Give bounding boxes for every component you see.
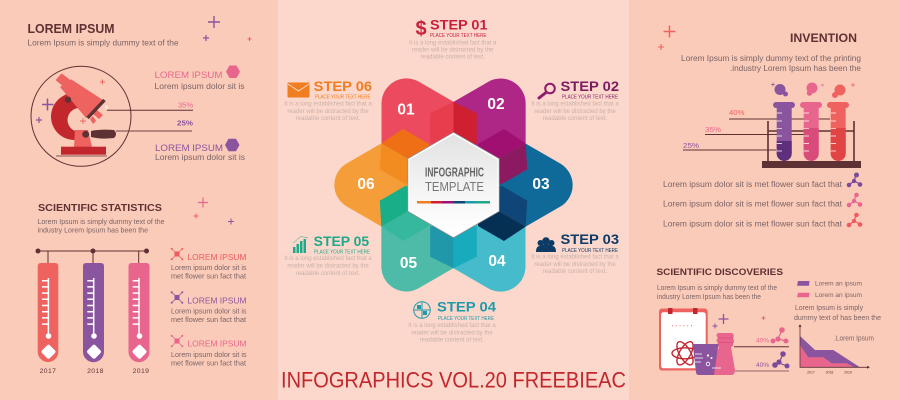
- list item: pink: [171, 335, 247, 368]
- text: invention intro: Lorem Ipsum is simply dummy text of the printing: [681, 54, 861, 63]
- callout: purple label: LOREM IPSUM: [155, 143, 223, 153]
- icon: dollar: $: [415, 18, 427, 40]
- step 05: [284, 234, 372, 277]
- text: invention intro: .industry Lorem Ipsum has been the: [730, 64, 862, 73]
- heading: scientific statistics: SCIENTIFIC STATISTICS: [38, 203, 162, 214]
- legend: Lorem an ipsum: [815, 280, 862, 288]
- list: invention items: Lorem ipsum dolor sit is met flower sun fact that: [663, 220, 843, 228]
- step 06: readable content of text.: [296, 116, 361, 122]
- step 03: reader will be distracted by the: [534, 262, 616, 268]
- petal 02: [418, 69, 546, 185]
- callout: purple 40 percent: [735, 352, 789, 371]
- text: statistics intro: industry Lorem Ipsum has been the: [38, 226, 148, 234]
- petal 05: [361, 185, 490, 301]
- step 04: PLACE YOUR TEXT HERE: [438, 316, 495, 322]
- text: discoveries intro: Lorem Ipsum is simply dummy text of the: [657, 285, 777, 292]
- chart: area chart: 2017: [807, 370, 815, 374]
- icon: sparkles: [658, 26, 676, 50]
- icon: microscope: [31, 66, 131, 166]
- step 02: PLACE YOUR TEXT HERE: [562, 95, 619, 101]
- step 02: reader will be distracted by the: [534, 109, 616, 115]
- step 04: STEP 04: [437, 300, 497, 314]
- chart: percent lines: 40%: [729, 108, 745, 117]
- petal numbers: 05: [400, 255, 417, 272]
- step 02: readable content of text.: [543, 116, 608, 122]
- chart: thermometer 2018: [83, 263, 104, 375]
- text: discoveries intro: industry Lorem Ipsum has been the: [657, 294, 761, 301]
- callout: pink 40 percent: [734, 328, 789, 347]
- step 03: PLACE YOUR TEXT HERE: [562, 248, 619, 254]
- petal numbers: 02: [487, 96, 505, 113]
- list: invention items: Lorem ipsum dolor sit is met flower sun fact that: [663, 200, 843, 208]
- text: chart note: [794, 305, 881, 343]
- chart: area chart: [798, 324, 870, 374]
- center hexagon: INFOGRAPHIC: [425, 166, 484, 180]
- tube: pink: [800, 82, 824, 161]
- icon: sparkles: [194, 198, 234, 224]
- panel: lorem ipsum microscope: [28, 16, 252, 166]
- list: invention items: Lorem ipsum dolor sit is met flower sun fact that: [663, 180, 843, 189]
- step 06: It is a long established fact that a: [284, 102, 372, 108]
- callout: pink label: [154, 66, 244, 91]
- step 05: readable content of text.: [296, 271, 361, 277]
- petal 06: [325, 132, 454, 247]
- callout: purple 40 percent: 40%: [756, 362, 769, 369]
- list item: purple: LOREM IPSUM: [188, 295, 247, 305]
- petal numbers: 01: [397, 102, 415, 118]
- icon: globe: [414, 302, 430, 318]
- list item: pink: LOREM IPSUM: [188, 339, 247, 349]
- step 05: reader will be distracted by the: [287, 264, 369, 270]
- step 04: readable content of text.: [420, 338, 485, 344]
- step 05: It is a long established fact that a: [284, 256, 372, 262]
- chart: 25 percent line: [116, 118, 193, 131]
- step 04: [408, 300, 497, 344]
- petal numbers: 03: [532, 176, 550, 193]
- list item: purple: [171, 291, 247, 324]
- chart: 35 percent line: 35%: [178, 100, 193, 110]
- list item: pink: met flower sun fact that: [171, 361, 246, 368]
- icon: sparkles: [203, 16, 252, 41]
- chart: test tube rack: [762, 82, 861, 168]
- chart: timeline rail: [36, 248, 149, 263]
- list item: red: Lorem ipsum dolor sit is: [171, 265, 247, 272]
- legend: Lorem an ipsum: [815, 292, 862, 299]
- list item: purple: met flower sun fact that: [171, 317, 246, 324]
- petal 03: [454, 123, 582, 238]
- callout: pink label: LOREM IPSUM: [154, 70, 222, 80]
- panel: scientific statistics: [36, 198, 247, 375]
- tube: red: [827, 83, 855, 161]
- step 01: [409, 18, 497, 60]
- step 03: [531, 232, 620, 275]
- chart: thermometer 2019: 2019: [133, 368, 149, 375]
- text: chart note: .Lorem Ipsum: [834, 336, 874, 343]
- chart: thermometer 2017: 2017: [40, 368, 56, 375]
- step 02: [531, 79, 619, 122]
- text: statistics intro: Lorem Ipsum is simply dummy text of the: [38, 217, 164, 226]
- chart: hexagon flower: [325, 69, 582, 301]
- step 03: readable content of text.: [543, 269, 608, 275]
- icon: magnifier: [539, 84, 555, 98]
- text: invention intro: [681, 54, 862, 73]
- step 06: STEP 06: [314, 79, 373, 94]
- icon: people: [536, 237, 556, 252]
- chart: percent lines: 25%: [683, 141, 699, 150]
- heading: lorem ipsum: LOREM IPSUM: [28, 21, 114, 36]
- step 06: reader will be distracted by the: [287, 109, 369, 115]
- petal 04: [454, 185, 526, 292]
- panel: scientific discoveries: [656, 267, 881, 375]
- callout: pink 40 percent: 40%: [756, 338, 769, 344]
- center hexagon: [408, 132, 499, 238]
- step 06: [284, 79, 373, 122]
- callout: purple label: Lorem ipsum dolor sit is: [155, 153, 245, 162]
- list item: purple: Lorem ipsum dolor sit is: [171, 308, 247, 315]
- petal numbers: 04: [488, 253, 506, 270]
- step 06: PLACE YOUR TEXT HERE: [315, 95, 371, 101]
- list item: red: [171, 248, 247, 281]
- step 02: It is a long established fact that a: [531, 102, 619, 108]
- chart: area chart: 2018: [826, 370, 833, 374]
- overlap facets: [370, 102, 537, 268]
- text: chart note: Lorem Ipsum is simply: [795, 305, 863, 312]
- text: discoveries intro: [657, 285, 777, 301]
- step 01: STEP 01: [430, 18, 488, 32]
- title: infographics banner: INFOGRAPHICS VOL.20 FREEBIEAC: [281, 368, 626, 392]
- list item: red: LOREM IPSUM: [188, 252, 247, 262]
- step 01: It is a long established fact that a: [409, 40, 497, 46]
- icon: bar chart: [293, 236, 308, 253]
- list item: red: met flower sun fact that: [171, 274, 246, 281]
- heading: invention: INVENTION: [790, 31, 857, 45]
- chart: 25 percent line: 25%: [177, 118, 193, 128]
- icon: envelope: [288, 82, 310, 98]
- step 04: It is a long established fact that a: [408, 323, 496, 329]
- chart: thermometer 2019: [128, 263, 150, 375]
- tube: purple: [771, 82, 795, 161]
- text: statistics intro: [38, 217, 164, 234]
- callout: purple label: [155, 139, 245, 162]
- step 03: It is a long established fact that a: [531, 255, 619, 261]
- panel: invention: [658, 26, 862, 228]
- icon: flask and beaker: [693, 314, 766, 375]
- step 04: reader will be distracted by the: [411, 330, 493, 336]
- chart: area chart: 2019: [844, 370, 852, 374]
- legend: [797, 280, 862, 299]
- chart: 35 percent line: [107, 100, 193, 110]
- petal 01: [382, 78, 454, 185]
- heading: scientific discoveries: SCIENTIFIC DISCOVERIES: [656, 267, 783, 278]
- chart: percent lines: 35%: [705, 125, 721, 134]
- step 02: STEP 02: [560, 79, 619, 94]
- list item: pink: Lorem ipsum dolor sit is: [171, 352, 247, 359]
- text: chart note: dummy text of has been the: [794, 315, 881, 322]
- icon: clipboard with atom: [659, 308, 708, 370]
- step 01: PLACE YOUR TEXT HERE: [430, 33, 487, 39]
- text: intro: Lorem Ipsum is simply dummy text of the: [28, 38, 179, 48]
- chart: thermometer 2018: 2018: [87, 368, 104, 375]
- callout: pink label: Lorem ipsum dolor sit is: [154, 82, 244, 91]
- center hexagon: TEMPLATE: [425, 179, 484, 194]
- step 05: PLACE YOUR TEXT HERE: [314, 250, 371, 256]
- chart: percent lines: [683, 108, 830, 150]
- step 01: reader will be distracted by the: [412, 48, 494, 54]
- step 05: STEP 05: [314, 234, 370, 249]
- chart: thermometer 2017: [38, 263, 58, 375]
- step 01: readable content of text.: [421, 54, 485, 60]
- step 03: STEP 03: [560, 232, 620, 247]
- petal numbers: 06: [357, 176, 375, 193]
- list: invention items: [663, 173, 862, 228]
- petal numbers: [357, 96, 550, 272]
